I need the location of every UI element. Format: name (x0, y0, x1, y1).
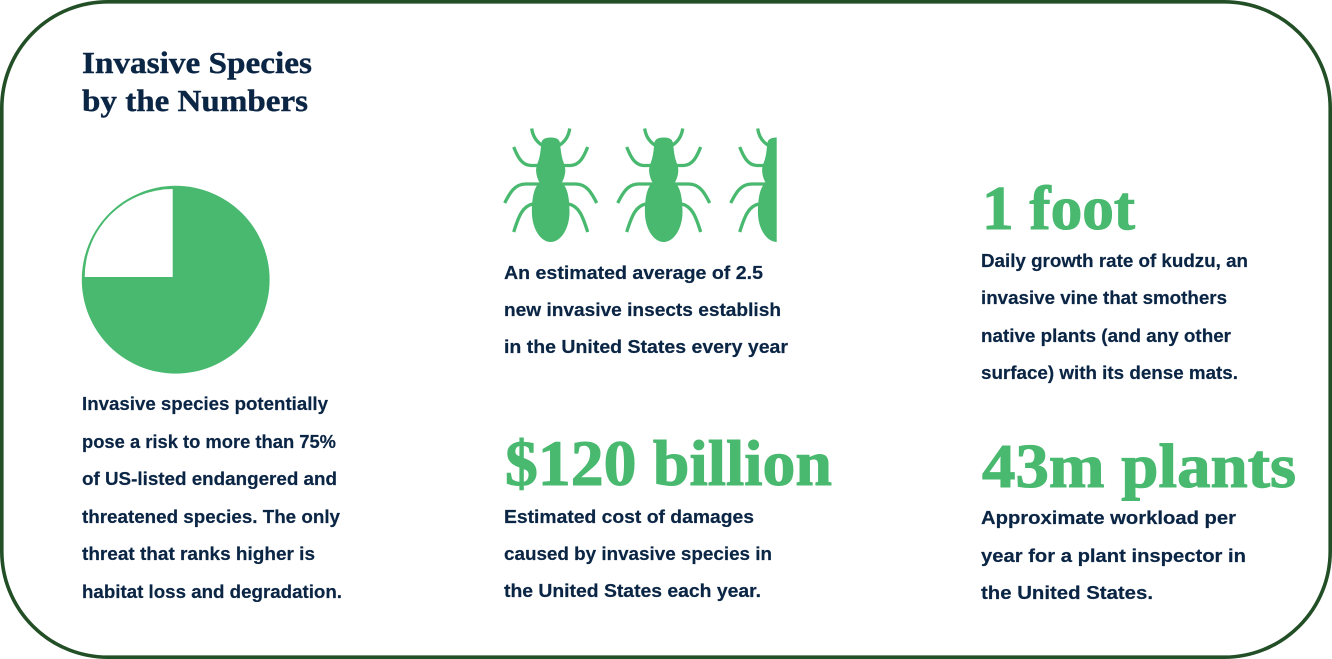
pie chart: 75 percent (82, 186, 270, 374)
text block: endangered species risk: threat that ranks higher is (82, 543, 315, 564)
title: Invasive Species (82, 45, 312, 80)
text block: cost of damages: caused by invasive species in (504, 543, 772, 564)
text block: new invasive insects: in the United States every year (504, 336, 788, 357)
text block: cost of damages: the United States each year. (504, 580, 761, 601)
text block: plant inspector workload: year for a plant inspector in (981, 545, 1246, 566)
title (82, 45, 312, 118)
icon: insect 1 (505, 128, 597, 242)
text block: plant inspector workload (981, 507, 1246, 603)
text block: endangered species risk: of US-listed endangered and (82, 468, 337, 489)
text block: endangered species risk (82, 393, 342, 602)
text block: kudzu growth: invasive vine that smothers (981, 287, 1227, 308)
text block: plant inspector workload: Approximate workload per (981, 507, 1236, 528)
text block: new invasive insects: An estimated average of 2.5 (504, 262, 763, 283)
text block: kudzu growth (981, 250, 1248, 383)
stat: $120 billion: $120 billion (505, 428, 832, 500)
stat: 1 foot: 1 foot (982, 175, 1135, 243)
text block: kudzu growth: Daily growth rate of kudzu, an (981, 250, 1248, 271)
stat: 43m plants: 43m plants (982, 433, 1296, 501)
text block: kudzu growth: native plants (and any other (981, 325, 1231, 346)
text block: new invasive insects: new invasive insects establish (504, 299, 781, 320)
text block: endangered species risk: pose a risk to more than 75% (82, 431, 336, 452)
icon: insect 2 (618, 128, 710, 242)
text block: new invasive insects (504, 262, 788, 357)
icon: half insect (731, 128, 777, 242)
text block: endangered species risk: Invasive species potentially (82, 393, 329, 414)
text block: kudzu growth: surface) with its dense mats. (981, 362, 1238, 383)
text block: endangered species risk: habitat loss and degradation. (82, 581, 342, 602)
text block: cost of damages: Estimated cost of damages (504, 506, 754, 527)
title: by the Numbers (82, 83, 308, 118)
text block: cost of damages (504, 506, 772, 601)
text block: plant inspector workload: the United States. (981, 582, 1153, 603)
text block: endangered species risk: threatened species. The only (82, 506, 341, 527)
